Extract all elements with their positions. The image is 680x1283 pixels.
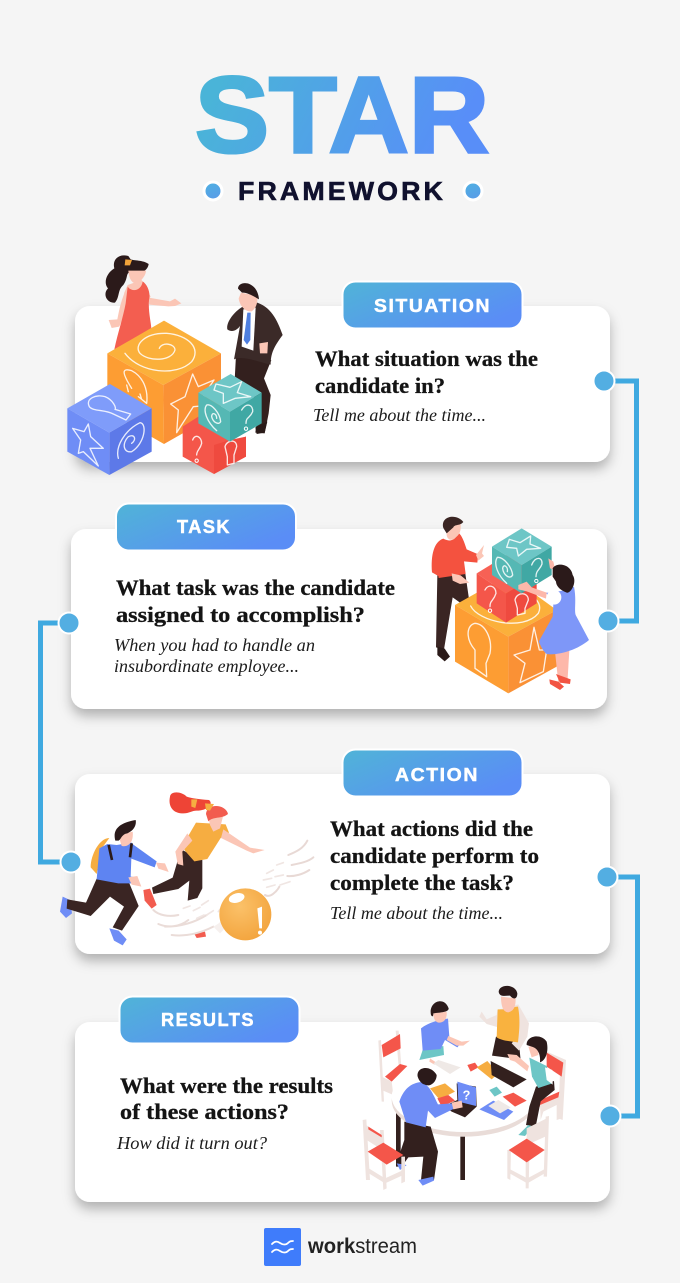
man in red sweater	[432, 517, 484, 661]
heading: task question: assigned to accomplish?	[116, 602, 365, 627]
illustration: two people stacking blocks	[432, 517, 589, 693]
panel: results	[75, 986, 610, 1202]
heading: task question: What task was the candidate	[116, 575, 395, 600]
badge: task	[116, 504, 296, 550]
heading: situation question	[315, 346, 538, 398]
winged golden ball	[153, 841, 313, 940]
heading: action question: complete the task?	[330, 870, 514, 895]
panel: task	[71, 504, 607, 709]
badge: action	[342, 750, 522, 796]
icon: waves	[264, 1228, 301, 1266]
badge: situation	[342, 282, 522, 328]
orange cube	[455, 575, 557, 693]
badge: action: ACTION	[395, 765, 479, 785]
teal cube	[198, 374, 262, 442]
connector: task to action	[40, 612, 82, 872]
front left chair	[363, 1119, 405, 1190]
badge: results: RESULTS	[161, 1010, 255, 1030]
badge: results	[120, 996, 300, 1044]
seated woman	[507, 1036, 555, 1136]
heading: task question	[116, 575, 395, 627]
heading: results question	[120, 1073, 333, 1124]
text: situation prompt: Tell me about the time...	[313, 405, 486, 425]
badge: situation: SITUATION	[374, 296, 491, 316]
table	[392, 1060, 536, 1180]
teal cube	[492, 528, 552, 593]
text: task prompt: insubordinate employee...	[114, 656, 299, 676]
illustration: two people with blocks	[67, 255, 283, 475]
connector: action to results	[596, 866, 638, 1126]
heading: situation question: candidate in?	[315, 373, 445, 398]
woman running with red hair	[143, 792, 265, 938]
heading: situation question: What situation was the	[315, 346, 538, 371]
heading: results question: What were the results	[120, 1073, 333, 1098]
standing person in vest	[479, 986, 529, 1061]
person with laptop	[397, 1068, 477, 1186]
red cube	[477, 555, 537, 623]
orange cube	[107, 321, 221, 444]
text: action prompt: Tell me about the time...	[330, 903, 503, 923]
heading: action question: What actions did the	[330, 816, 533, 841]
logo: workstream: workstream	[307, 1235, 417, 1258]
back left chair	[378, 1031, 407, 1102]
front right chair	[507, 1116, 549, 1188]
person with laptop: ?	[463, 1088, 470, 1102]
heading: action question: candidate perform to	[330, 843, 539, 868]
blue cube	[67, 384, 152, 475]
red cube	[183, 417, 246, 474]
title: STAR: STAR	[195, 54, 489, 175]
text: task prompt: When you had to handle an	[114, 635, 315, 655]
man in suit	[227, 283, 283, 434]
woman in red dress	[105, 255, 181, 349]
heading: action question	[330, 816, 539, 895]
connector: situation to task	[594, 370, 636, 632]
runner with backpack	[60, 820, 169, 945]
badge: task: TASK	[177, 517, 231, 537]
heading: results question: of these actions?	[120, 1099, 289, 1124]
panel: situation	[67, 255, 610, 475]
subtitle: FRAMEWORK with dots: FRAMEWORK	[238, 176, 446, 206]
back right chair	[537, 1052, 566, 1120]
text: results prompt: How did it turn out?	[116, 1133, 267, 1153]
text: task prompt	[114, 635, 315, 676]
logo: workstream	[264, 1228, 417, 1266]
illustration: two people chasing a winged ball	[60, 792, 313, 945]
girl in blue dress	[518, 558, 589, 690]
illustration: team around a table	[363, 986, 566, 1190]
seated person in blue	[419, 1001, 470, 1065]
panel: action	[60, 750, 610, 954]
